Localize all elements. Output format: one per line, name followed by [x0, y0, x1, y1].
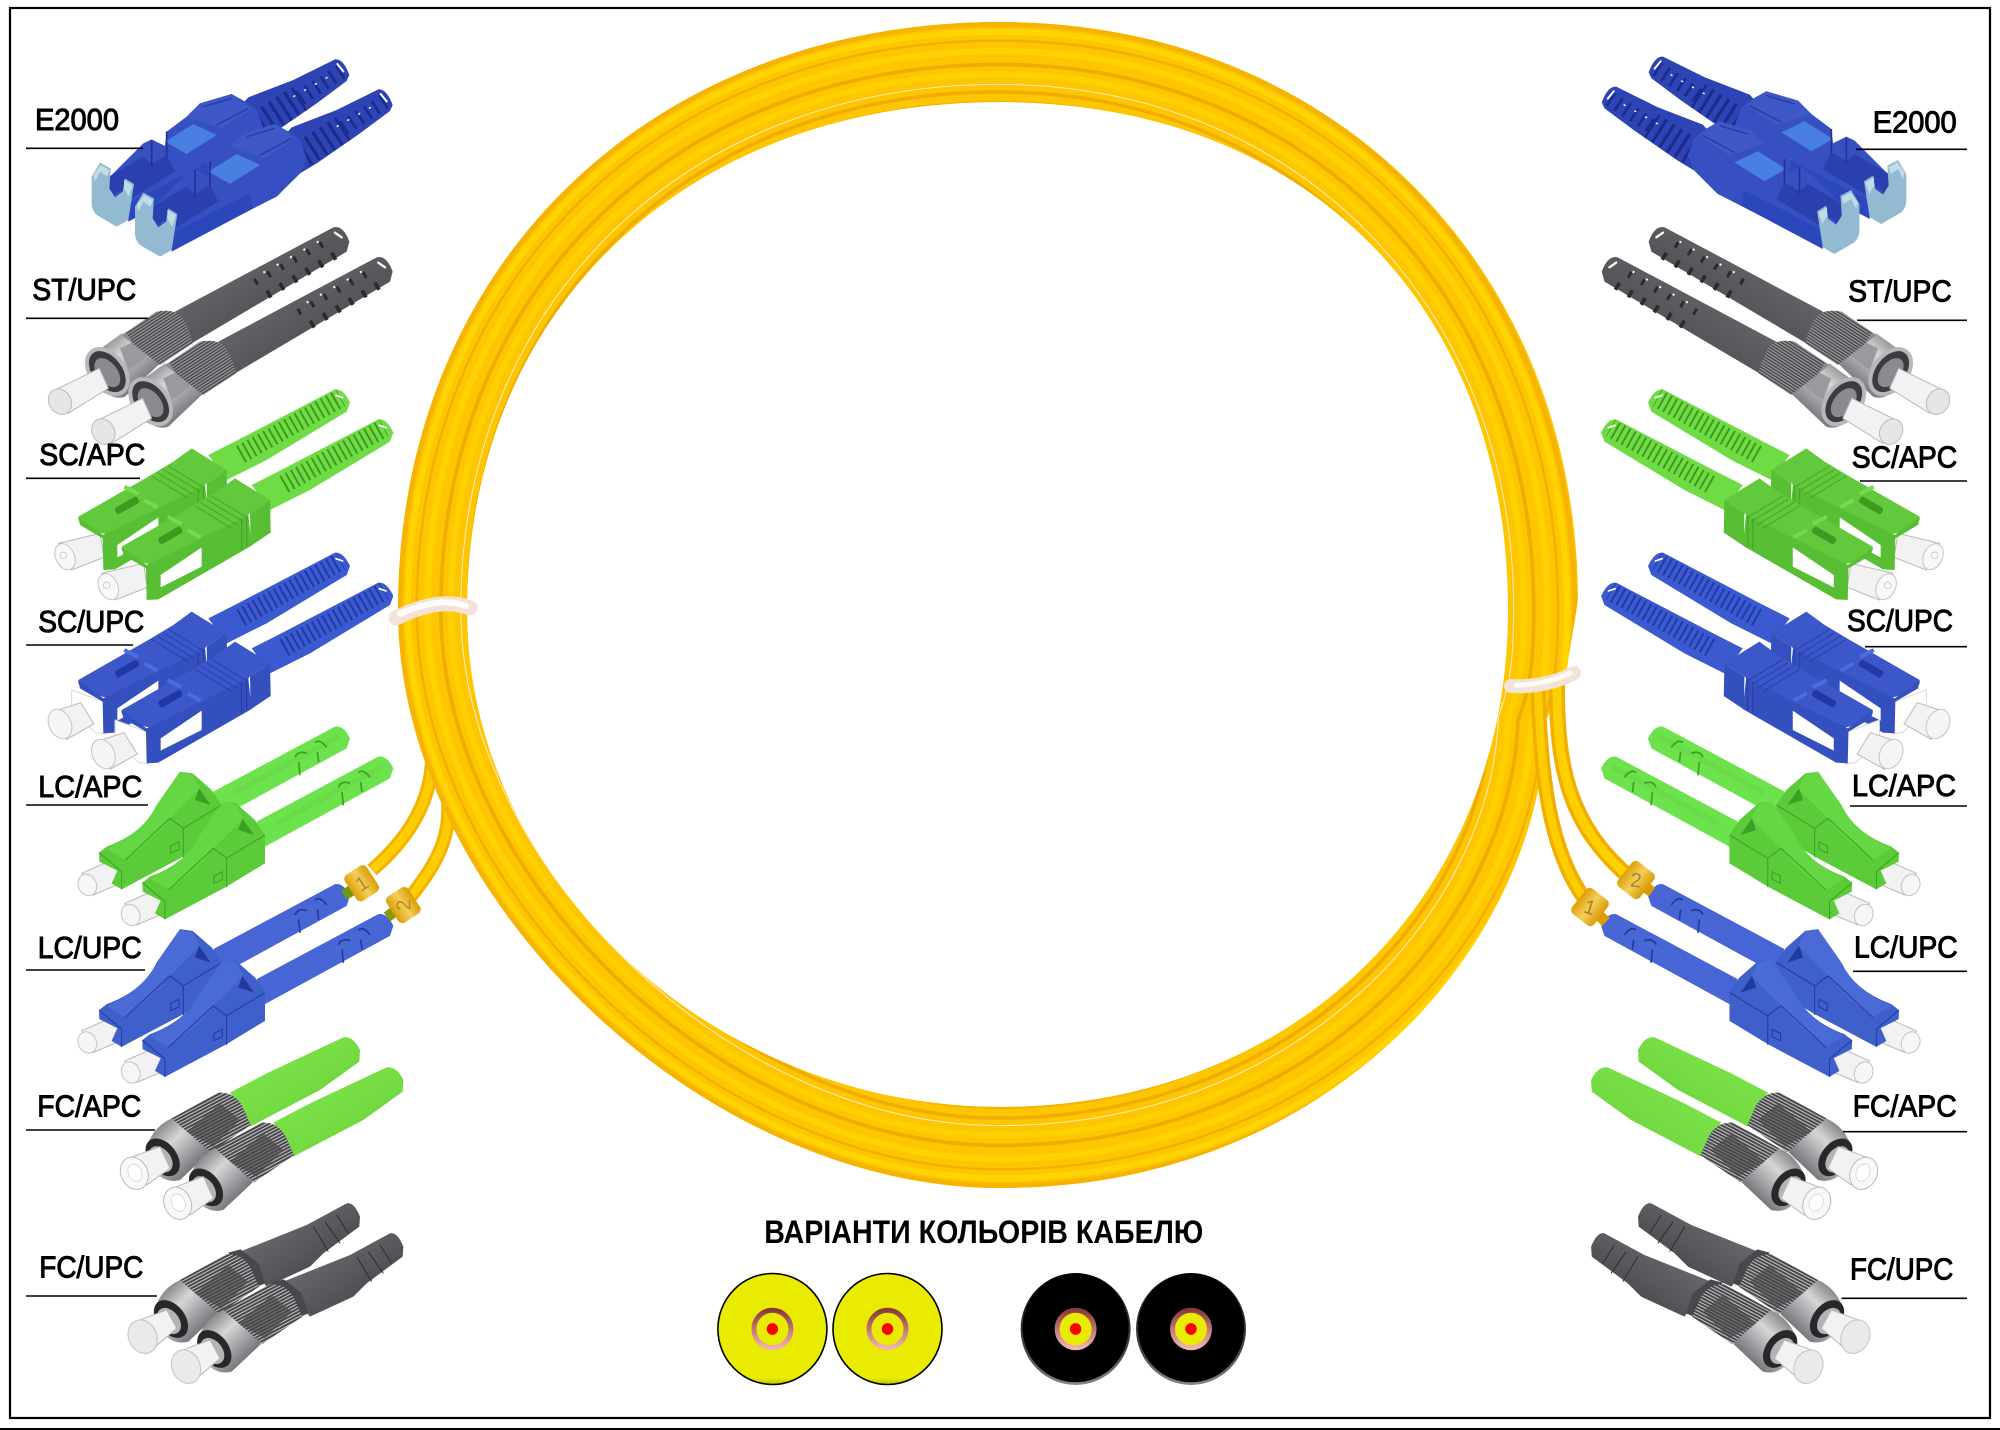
right cable tails in front of the coil — [1538, 680, 1628, 898]
cable marker tag 2 left: 2 — [393, 899, 416, 911]
yellow cable coil — [398, 22, 1578, 1188]
connector: SC/UPC right — [1601, 553, 1954, 773]
cable cross-section: black pair — [1021, 1273, 1246, 1385]
connector: SC/APC right — [1601, 389, 1947, 603]
connector: ST/UPC right — [1602, 227, 1954, 449]
cable marker tag 1 right — [1569, 886, 1611, 928]
connector: LC/UPC left — [75, 884, 393, 1086]
connector: E2000 left — [92, 59, 393, 257]
label: SC/UPC left: SC/UPC — [38, 604, 144, 639]
yellow section 1 — [718, 1274, 827, 1384]
label: LC/APC right: LC/APC — [1852, 768, 1956, 803]
label: FC/UPC right: FC/UPC — [1850, 1251, 1953, 1286]
cable marker tag 2 right — [1615, 859, 1657, 901]
label: FC/UPC left: FC/UPC — [39, 1249, 143, 1284]
connector: SC/UPC left — [44, 553, 393, 773]
label: SC/APC left: SC/APC — [39, 437, 145, 472]
black section 2 — [1136, 1273, 1246, 1385]
yellow section 2 — [833, 1274, 942, 1384]
label: E2000 left: E2000 — [35, 102, 119, 137]
left cable tails behind the coil — [372, 700, 448, 900]
label: SC/UPC right: SC/UPC — [1847, 603, 1953, 638]
connector: LC/APC right — [1601, 726, 1923, 929]
connector: FC/UPC right — [1591, 1203, 1875, 1388]
cable cross-section: yellow pair — [718, 1274, 942, 1384]
label: LC/UPC right: LC/UPC — [1854, 929, 1958, 964]
label: FC/UPC right — [1842, 1251, 1967, 1298]
connector: E2000 right — [1602, 57, 1906, 254]
label: E2000 left — [26, 102, 143, 148]
label: ST/UPC right: ST/UPC — [1848, 274, 1952, 309]
connector: LC/UPC right — [1601, 884, 1923, 1086]
connector: ST/UPC left — [44, 227, 393, 449]
label: LC/APC left: LC/APC — [38, 769, 142, 804]
connector: FC/APC right — [1591, 1037, 1883, 1224]
cable marker tag 1 left: 1 — [352, 872, 373, 896]
connector: LC/APC left — [75, 726, 393, 929]
label: LC/UPC left: LC/UPC — [38, 930, 142, 965]
cable marker tag 2 right: 2 — [1629, 869, 1643, 893]
cable marker tag 2 left — [384, 885, 423, 925]
black section 1 — [1021, 1273, 1131, 1385]
cable marker tag 1 right: 1 — [1581, 896, 1598, 920]
label: FC/APC left: FC/APC — [37, 1089, 141, 1124]
label: SC/APC right: SC/APC — [1852, 440, 1957, 475]
heading: cable colour options: ВАРІАНТИ КОЛЬОРІВ КАБЕЛЮ — [764, 1214, 1203, 1250]
label: ST/UPC left: ST/UPC — [32, 272, 136, 307]
cable stubs between tags and boots — [344, 880, 1652, 922]
connector: SC/APC left — [51, 389, 393, 603]
label: FC/UPC left — [26, 1249, 157, 1296]
bottom black bar — [0, 1428, 2000, 1430]
label: E2000 right: E2000 — [1873, 104, 1957, 139]
right cable tie — [1511, 673, 1574, 686]
cable marker tag 1 left — [342, 863, 381, 903]
connector: FC/UPC left — [123, 1203, 403, 1388]
label: E2000 right — [1856, 104, 1967, 149]
left cable tie — [396, 602, 470, 618]
connector: FC/APC left — [115, 1037, 403, 1224]
label: FC/APC right: FC/APC — [1853, 1089, 1957, 1124]
